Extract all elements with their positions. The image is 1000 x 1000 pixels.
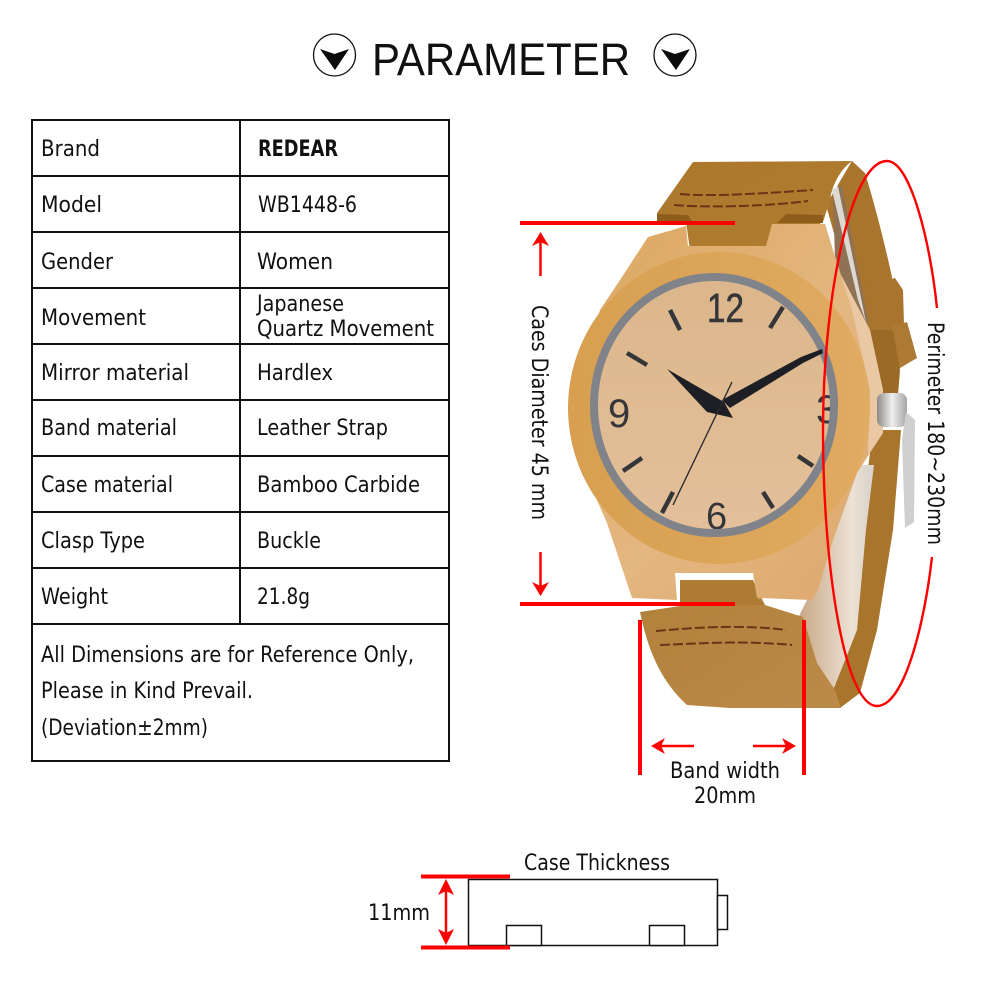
- row: clasp type: Buckle: [257, 529, 321, 554]
- row: mirror material: Hardlex: [257, 361, 333, 386]
- note: reference dimensions: Please in Kind Prevail.: [41, 679, 253, 704]
- label: perimeter: Perimeter 180~230mm: [922, 322, 947, 545]
- lower strap stitching: [656, 627, 792, 645]
- dimension lines: [520, 223, 735, 604]
- upper back strap: [826, 161, 892, 400]
- dial tick marks: [623, 307, 813, 513]
- up arrow: [532, 232, 549, 276]
- row: mirror material: Mirror material: [41, 361, 189, 386]
- row: gender: Women: [257, 250, 333, 275]
- top strap front: [657, 161, 852, 250]
- row: case material: [41, 473, 420, 498]
- label: band width: [670, 759, 780, 809]
- pale case side: [825, 224, 883, 455]
- dimension: band width: [640, 620, 804, 809]
- right arrow: [753, 738, 796, 754]
- dial face: [594, 277, 834, 533]
- icon: right down arrow badge: [654, 34, 696, 76]
- row: model: WB1448-6: [258, 193, 357, 218]
- double-headed arrow: [438, 879, 454, 945]
- down arrow: [532, 552, 549, 596]
- row: movement: Quartz Movement: [257, 317, 434, 342]
- label: case thickness: Case Thickness: [524, 851, 670, 876]
- label: band width: 20mm: [694, 784, 756, 809]
- thickness limit lines: [421, 876, 510, 948]
- diagram: case thickness: [368, 851, 728, 948]
- row: clasp type: [41, 529, 321, 554]
- top strap stitching: [674, 190, 813, 206]
- strap keeper upper: [863, 278, 904, 331]
- note: reference dimensions: (Deviation±2mm): [41, 716, 208, 741]
- dial numerals: 3: [816, 388, 838, 432]
- icon: left down arrow badge: [314, 34, 356, 76]
- dial numerals: 9: [608, 392, 630, 436]
- row: weight: 21.8g: [257, 585, 310, 610]
- row: weight: [41, 585, 310, 610]
- row: movement: Movement: [41, 306, 146, 331]
- left arrow: [651, 738, 694, 754]
- label: band width: Band width: [670, 759, 780, 784]
- row: band material: Leather Strap: [257, 416, 388, 441]
- dimension: case diameter: [520, 223, 735, 604]
- inner strap lining: [798, 465, 874, 688]
- illustration: bamboo wristwatch: [568, 161, 917, 708]
- lower strap tab: [680, 580, 765, 606]
- note: reference dimensions: All Dimensions are for Reference Only,: [41, 643, 414, 668]
- lower strap: [640, 580, 841, 708]
- upper strap lining: [833, 185, 870, 380]
- panel: specification table: [32, 120, 449, 761]
- row: band material: Band material: [41, 416, 177, 441]
- strap shadow patches: [657, 214, 823, 223]
- row: mirror material: [41, 361, 333, 386]
- table grid: [32, 120, 449, 761]
- row: movement: Japanese: [255, 292, 344, 317]
- row: brand: [41, 137, 338, 162]
- minute hand: [722, 349, 823, 408]
- row: model: Model: [41, 193, 102, 218]
- hour hand: [667, 369, 733, 418]
- crown: [877, 393, 907, 427]
- strap keeper lower: [893, 322, 917, 368]
- label: 11mm: 11mm: [368, 901, 430, 926]
- dial numerals: 12: [707, 285, 744, 331]
- second hand: [673, 382, 732, 505]
- row: gender: [41, 250, 333, 275]
- row: band material: [41, 416, 388, 441]
- watch case: [570, 224, 883, 600]
- row: brand: Brand: [41, 137, 100, 162]
- lug gap: [685, 573, 747, 580]
- row: case material: Case material: [41, 473, 173, 498]
- band edge lines: [640, 620, 804, 775]
- note: reference dimensions: [41, 643, 414, 741]
- row: model: [41, 193, 357, 218]
- case side outline: [468, 880, 728, 946]
- dial numerals: 6: [706, 496, 727, 538]
- heading text: PARAMETER: [372, 34, 630, 85]
- label: case diameter: Caes Diameter 45 mm: [526, 305, 551, 520]
- title: PARAMETER with arrow icons: [314, 34, 696, 85]
- strap tail under keepers: [868, 330, 900, 395]
- grey bezel ring: [594, 277, 834, 533]
- dial numerals: [608, 285, 838, 538]
- silver lining strip: [832, 186, 866, 322]
- row: weight: Weight: [41, 585, 108, 610]
- row: brand: REDEAR: [258, 137, 338, 162]
- row: gender: Gender: [41, 250, 114, 275]
- row: clasp type: Clasp Type: [41, 529, 145, 554]
- lower back strap: [825, 430, 901, 708]
- bamboo bezel: [568, 252, 870, 564]
- perimeter ellipse line: [823, 161, 937, 706]
- row: movement: [41, 292, 434, 342]
- buckle: [902, 412, 915, 528]
- row: case material: Bamboo Carbide: [257, 473, 420, 498]
